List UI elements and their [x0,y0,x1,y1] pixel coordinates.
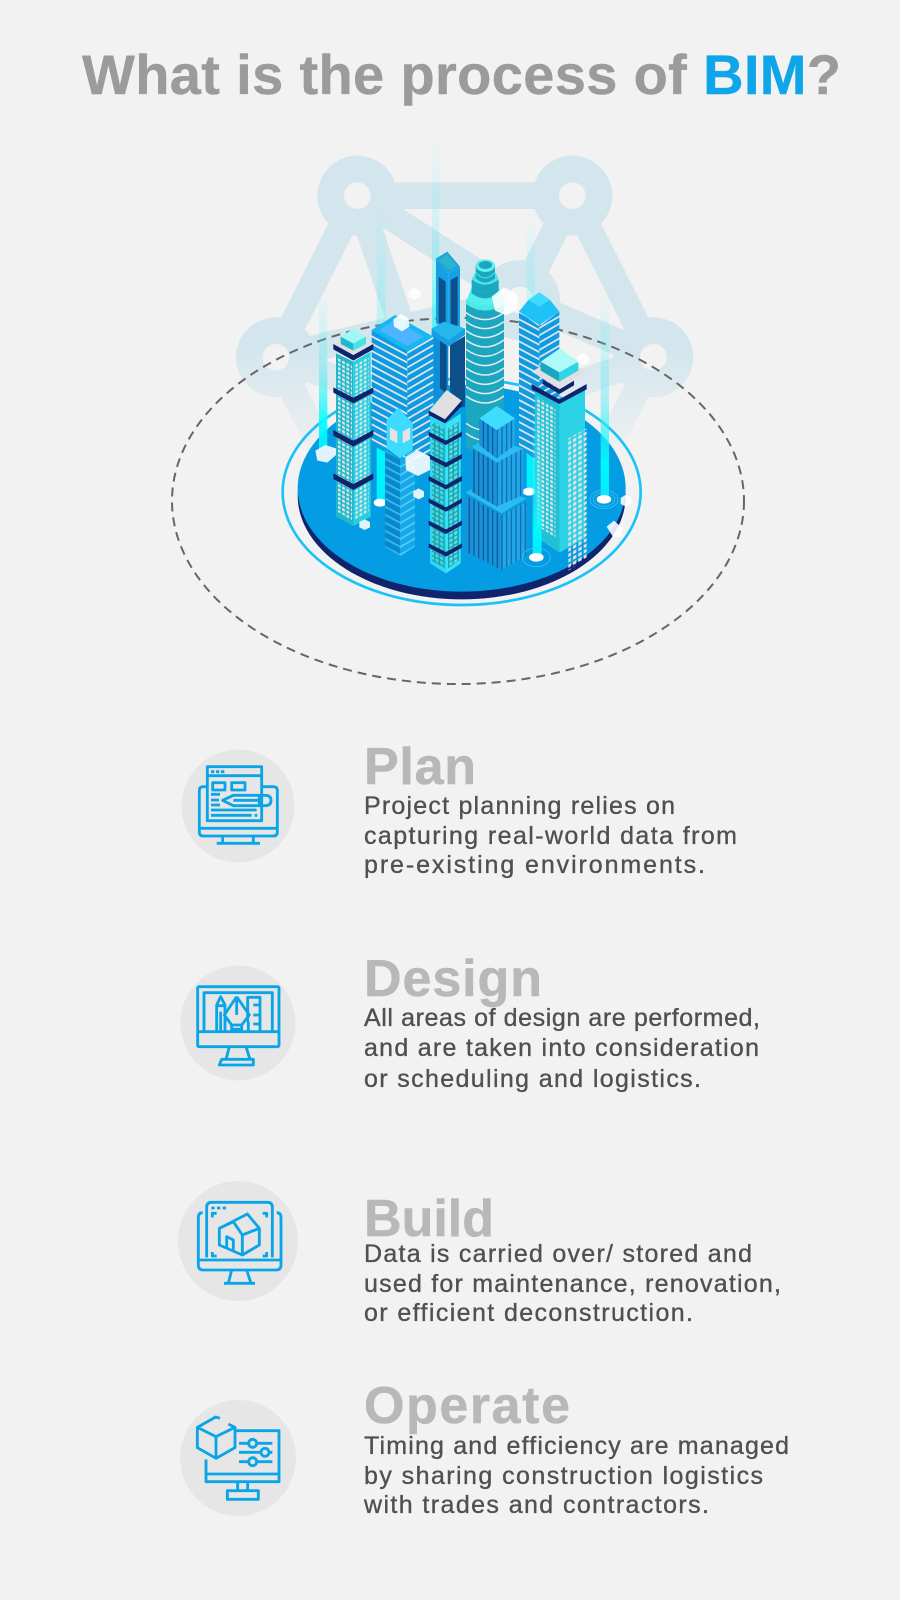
step: Build [178,1181,781,1327]
building: front centre banded tower [429,390,462,573]
building: left banded tower [333,329,373,526]
title: What is the process of BIM? [82,43,841,106]
text: Design description: or scheduling and logistics. [364,1065,701,1093]
icon: house model on monitor [178,1181,298,1301]
icon: design tools on monitor [180,966,296,1080]
building: striped slim tower [385,408,415,556]
heading: Operate: Operate [364,1377,570,1435]
step: Operate [180,1377,789,1519]
heading: Design: Design [364,950,542,1008]
heading: Build: Build [364,1190,494,1248]
text: Operate description [363,1432,789,1519]
text: Build description: Data is carried over/ stored and [364,1240,752,1268]
network graph backdrop [236,156,694,434]
text: Plan description: capturing real-world data from [364,822,737,850]
building: tall tower [432,252,465,410]
building: front stepped tower [466,406,527,570]
building: stepped back tower [519,292,559,463]
step: Design [180,950,760,1093]
text: Plan description [364,792,737,879]
building: round tower [466,259,504,454]
isometric city [283,130,641,605]
white hexagon particles [315,287,632,537]
building: wide striped block [372,315,433,463]
heading: Plan: Plan [364,738,476,796]
text: Operate description: by sharing construction logistics [364,1462,763,1490]
step: Plan [182,738,737,879]
text: Operate description: Timing and efficiency are managed [364,1432,789,1460]
text: Design description [364,1004,760,1093]
text: Operate description: with trades and contractors. [363,1491,709,1519]
text: Design description: All areas of design are performed, [364,1004,760,1032]
text: Plan description: pre-existing environments. [364,851,705,879]
icon: cube and sliders on monitor [180,1400,296,1516]
dashed orbit ellipse [172,318,744,684]
text: Build description: or efficient deconstruction. [364,1299,693,1327]
text: Design description: and are taken into consideration [364,1034,759,1062]
building: right tall tower [532,348,587,571]
icon: plan document on monitor [182,750,294,862]
text: Build description: used for maintenance, renovation, [364,1270,781,1298]
illustration: BIM city on a platform [172,130,744,684]
text: Plan description: Project planning relies on [364,792,675,820]
back light beams [374,130,618,509]
platform [283,379,641,605]
front light beams [319,290,550,567]
text: Build description [364,1240,781,1327]
